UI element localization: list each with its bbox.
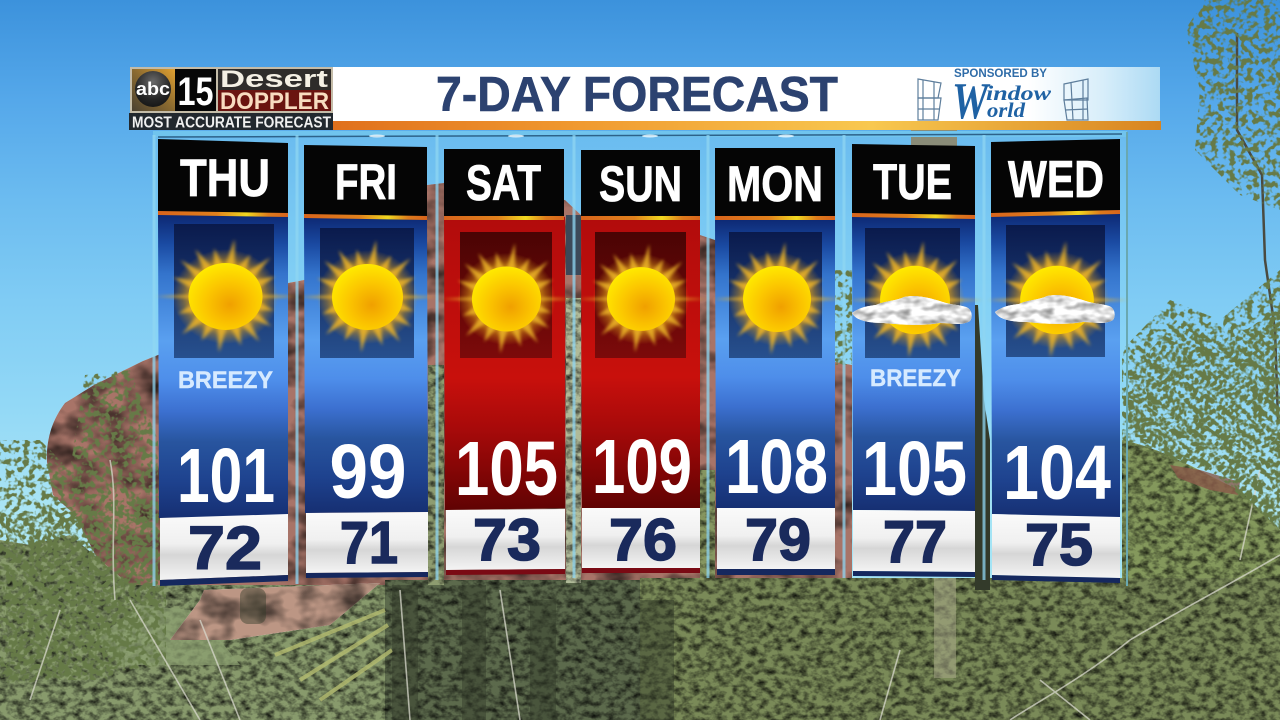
weather icon: sun	[441, 232, 574, 358]
low temperature box: 79	[745, 507, 811, 573]
weather icon: sun behind cloud	[849, 228, 983, 358]
panel: Thursday: THU	[180, 149, 270, 208]
panel: Monday: MON	[727, 156, 823, 212]
high temperature: 101	[177, 433, 275, 519]
panel backing frame	[153, 131, 1127, 586]
day header	[852, 144, 975, 216]
logo: abc15 Desert Doppler: Desert	[220, 66, 328, 93]
panel: Sunday	[577, 150, 707, 573]
branches	[30, 460, 1280, 720]
panel: Tuesday	[849, 144, 983, 577]
low temperature box: 75	[1025, 512, 1093, 578]
grass patch	[95, 605, 240, 665]
icon: left window	[918, 79, 941, 120]
dark cactus trunks	[240, 585, 674, 720]
low temperature box	[853, 509, 975, 577]
icon: right window	[1064, 79, 1088, 120]
logo: abc15 Desert Doppler: abc	[136, 79, 170, 99]
low temperature box: 73	[473, 507, 541, 573]
condition label: BREEZY	[870, 365, 961, 392]
panel: Thursday	[155, 139, 298, 586]
rock formation	[47, 183, 852, 600]
panel: Tuesday: TUE	[873, 154, 952, 210]
sponsor: Window World: SPONSORED BY	[954, 68, 1047, 80]
right hill	[1122, 440, 1280, 720]
low temperature box	[717, 507, 835, 575]
day header	[158, 139, 288, 214]
high temperature: 105	[862, 426, 967, 512]
panel: Monday	[713, 148, 843, 575]
hill rock patch	[1170, 465, 1240, 495]
low temperature box	[992, 512, 1120, 583]
high temperature: 109	[592, 424, 692, 510]
day header	[581, 150, 700, 218]
weather icon: sun	[713, 232, 843, 358]
panel: Saturday	[441, 149, 574, 575]
panel: Friday	[300, 145, 437, 578]
sponsor: Window World: indow	[986, 81, 1052, 105]
day header	[304, 145, 427, 217]
day header	[715, 148, 835, 218]
thin tree in Mon-Tue gap	[835, 270, 852, 365]
upper right tree	[1122, 0, 1280, 534]
logo: abc15 Desert Doppler: MOST ACCURATE FORECAST	[132, 114, 331, 132]
weather icon: sun	[155, 224, 298, 358]
pink ground patch	[170, 583, 380, 640]
low temperature box	[446, 507, 565, 575]
sponsor: Window World: orld	[987, 98, 1026, 122]
low temperature box: 77	[883, 509, 947, 575]
logo: abc15 Desert Doppler: DOPPLER	[220, 88, 329, 115]
panel: Wednesday	[987, 139, 1129, 583]
logo: abc15 Desert Doppler: 15	[178, 70, 214, 114]
low temperature box: 72	[188, 514, 262, 582]
weather icon: sun	[300, 228, 437, 358]
panel: Saturday: SAT	[466, 155, 541, 211]
sponsor: Window World: W	[952, 73, 991, 130]
high temperature: 108	[725, 424, 828, 510]
palm fronds	[275, 610, 392, 700]
weather icon: sun behind cloud	[987, 225, 1129, 358]
glass backing behind panels	[153, 131, 1127, 586]
low temperature box	[582, 507, 700, 573]
day header	[991, 139, 1120, 214]
low temperature box: 76	[609, 507, 677, 573]
high temperature: 99	[330, 429, 406, 515]
frame glints	[369, 134, 794, 138]
title: 7-DAY FORECAST	[436, 68, 838, 122]
left shrubs over rock	[0, 370, 158, 680]
logo: abc15 Desert Doppler	[129, 66, 333, 132]
centre dark vegetation	[385, 580, 645, 720]
panel: Sunday: SUN	[599, 156, 682, 212]
low temperature box: 71	[340, 510, 398, 576]
panel: Wednesday: WED	[1008, 151, 1104, 209]
header bar	[333, 67, 1161, 130]
saguaro columns between panels	[428, 365, 444, 585]
low temperature box	[160, 514, 288, 586]
right ground vegetation	[640, 578, 1280, 720]
sponsor: Window World	[918, 68, 1088, 130]
high temperature: 104	[1003, 430, 1111, 516]
weather icon: sun	[577, 232, 707, 358]
condition label: BREEZY	[178, 367, 273, 394]
low temperature box	[306, 510, 428, 578]
high temperature: 105	[455, 426, 558, 512]
left ground vegetation	[0, 535, 400, 720]
day header	[444, 149, 564, 218]
panel: Friday: FRI	[335, 154, 397, 210]
saguaro top above Tuesday	[911, 128, 957, 146]
